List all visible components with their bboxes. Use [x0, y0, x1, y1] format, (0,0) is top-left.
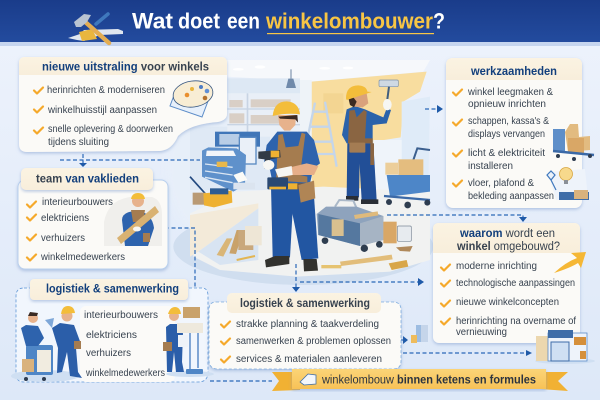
title [132, 8, 445, 34]
shop interior [167, 60, 430, 273]
heading [456, 228, 560, 253]
panel: werkzaamheden [446, 58, 594, 208]
checklist: vloer, plafond & [468, 178, 534, 189]
icon: document [300, 374, 316, 385]
central illustration: renovation scene [167, 60, 433, 285]
icon: boxes on cart [553, 124, 594, 161]
checklist: moderne inrichting [456, 261, 537, 272]
checklist: snelle oplevering & doorwerken [48, 124, 173, 135]
panel: logistiek & samenwerking (left) [11, 279, 214, 382]
heading: werkzaamheden [470, 66, 557, 78]
heading [21, 168, 153, 190]
checklist: schappen, kassa's & [468, 116, 549, 127]
heading: nieuwe uitstraling voor winkels [42, 62, 209, 74]
title: Wat [132, 8, 174, 34]
checklist: tijdens sluiting [48, 137, 109, 148]
list: verhuizers [86, 348, 131, 359]
checklist: winkelmedewerkers [40, 252, 125, 263]
checklist: opnieuw inrichten [468, 99, 546, 110]
icon: two workers with cart [11, 306, 82, 382]
checklist: technologische aanpassingen [456, 278, 575, 289]
checklist: interieurbouwers [42, 197, 113, 208]
icon: hammer and tools [68, 14, 123, 43]
panel: waarom wordt een winkel omgebouwd [433, 223, 586, 343]
wood pile under counter [217, 226, 262, 257]
back painter worker [342, 80, 398, 204]
checklist: services & materialen aanleveren [236, 354, 382, 365]
header band [0, 0, 600, 46]
checklist: herinrichting na overname of [456, 316, 576, 327]
panel: nieuwe uitstraling voor winkels [19, 57, 227, 152]
heading [30, 279, 188, 300]
banner text: winkelombouw binnen ketens en formules [321, 374, 536, 386]
heading [227, 293, 381, 313]
machine on counter [202, 132, 260, 192]
yellow toolbox [190, 177, 232, 207]
heading: waarom wordt een [459, 228, 555, 240]
banner: winkelombouw binnen ketens en formules [272, 369, 568, 391]
checklist: samenwerken & problemen oplossen [236, 336, 391, 347]
checklist: vernieuwing [456, 327, 507, 338]
checklist: winkel leegmaken & [467, 87, 553, 98]
list: winkelmedewerkers [85, 368, 165, 379]
central worker with drill [258, 101, 320, 271]
heading: winkel omgebouwd? [456, 241, 560, 253]
heading: logistiek & samenwerking [240, 298, 370, 310]
checklist: herinrichten & moderniseren [47, 85, 165, 96]
checklist: licht & elektriciteit [468, 148, 545, 159]
icon: lamp and materials [547, 168, 589, 200]
ladder [305, 102, 337, 167]
checklist: installeren [468, 161, 513, 172]
heading: team van vaklieden [36, 174, 139, 186]
list: elektriciens [86, 330, 137, 341]
arrow: growth [554, 252, 586, 273]
icon: worker carrying planks [104, 193, 162, 246]
title: doet [178, 8, 221, 34]
panel: logistiek & samenwerking (centre) [209, 293, 401, 369]
checklist: winkelhuisstijl aanpassen [47, 105, 157, 116]
checklist: bekleding aanpassen [468, 191, 554, 202]
floor tools [237, 246, 413, 270]
floor [173, 187, 433, 285]
title: winkelombouwer [265, 8, 433, 34]
checklist: verhuizers [41, 233, 85, 244]
icon: bottles [411, 325, 428, 343]
checklist [441, 261, 576, 338]
icon: palette and plans [170, 78, 215, 117]
checklist: strakke planning & taakverdeling [236, 319, 379, 330]
tool trolley [317, 200, 411, 252]
heading: logistiek & samenwerking [46, 284, 179, 296]
title: ? [433, 8, 445, 34]
list: interieurbouwers [84, 310, 158, 321]
blue cart with boxes [384, 148, 430, 208]
panel: team van vaklieden [18, 168, 168, 269]
icon: worker with boxes and trolley [163, 307, 214, 377]
arrowheads [79, 105, 532, 356]
list [84, 310, 165, 379]
checklist [221, 319, 391, 365]
checklist: elektriciens [41, 213, 89, 224]
checklist [453, 87, 554, 202]
checklist [27, 197, 125, 263]
checklist [34, 85, 173, 148]
connector arrows [60, 109, 527, 381]
checklist: displays vervangen [468, 129, 545, 140]
title: een [227, 8, 260, 34]
checklist: nieuwe winkelconcepten [456, 297, 559, 308]
icon: shop building [535, 330, 595, 364]
